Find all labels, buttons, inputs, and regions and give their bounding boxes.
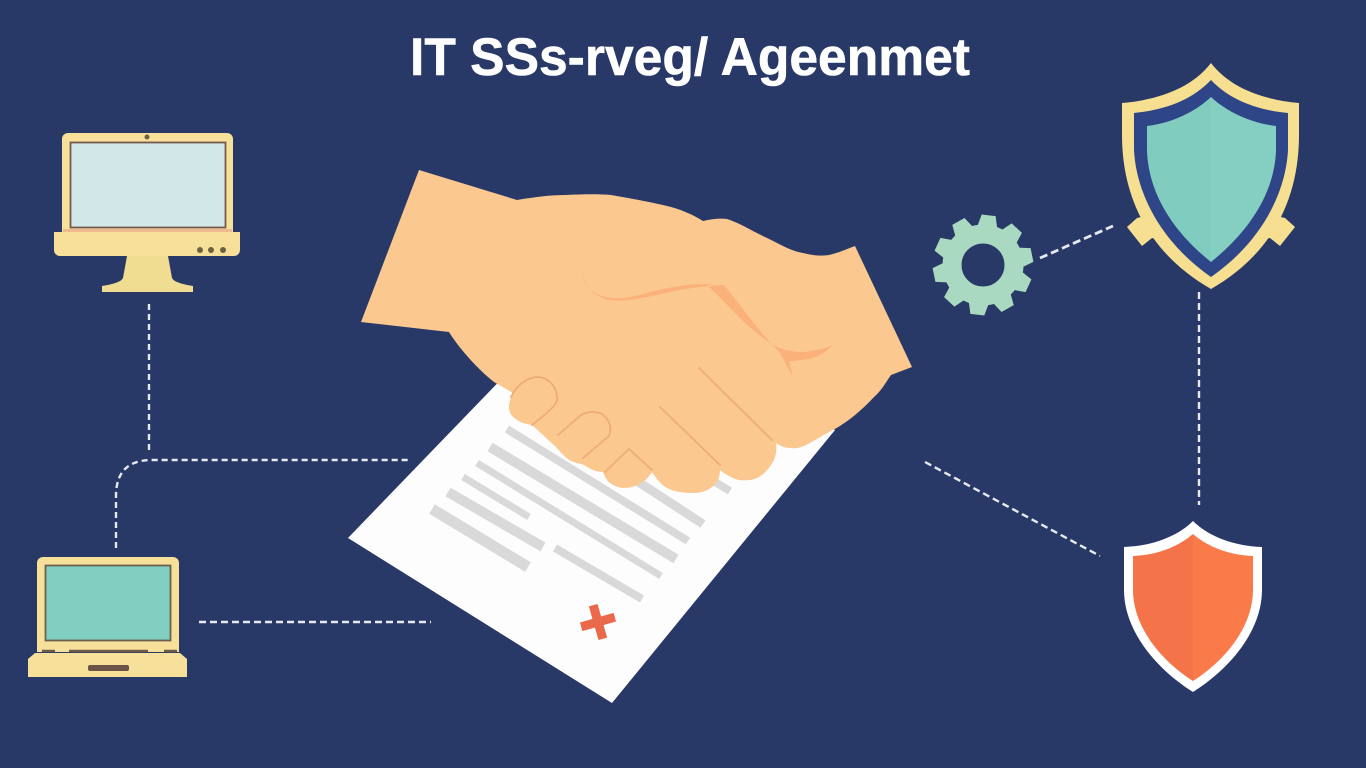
dashed connector: gear to shield [1040, 226, 1113, 258]
icon: teal shield with gold border [1122, 63, 1299, 289]
agreement document [348, 280, 835, 703]
icon: orange shield with white border [1124, 521, 1262, 692]
handshake [361, 170, 912, 493]
text lines [432, 429, 730, 599]
icon: desktop monitor [54, 133, 240, 292]
red cross mark [576, 600, 620, 644]
finger lines [511, 368, 772, 472]
hands silhouette [361, 170, 912, 493]
dashed connector: agreement to orange shield [925, 462, 1100, 556]
dashed connector: teal shield to orange shield [1198, 292, 1200, 505]
icon: gear [932, 214, 1034, 316]
title: IT SSs-rveg/ Ageenmet [410, 28, 970, 87]
palm crease [581, 270, 833, 377]
dashed connector: desktop to agreement [116, 304, 409, 548]
paper sheet [348, 280, 835, 703]
icon: laptop [28, 557, 187, 677]
dashed connector: laptop to agreement [199, 621, 431, 623]
